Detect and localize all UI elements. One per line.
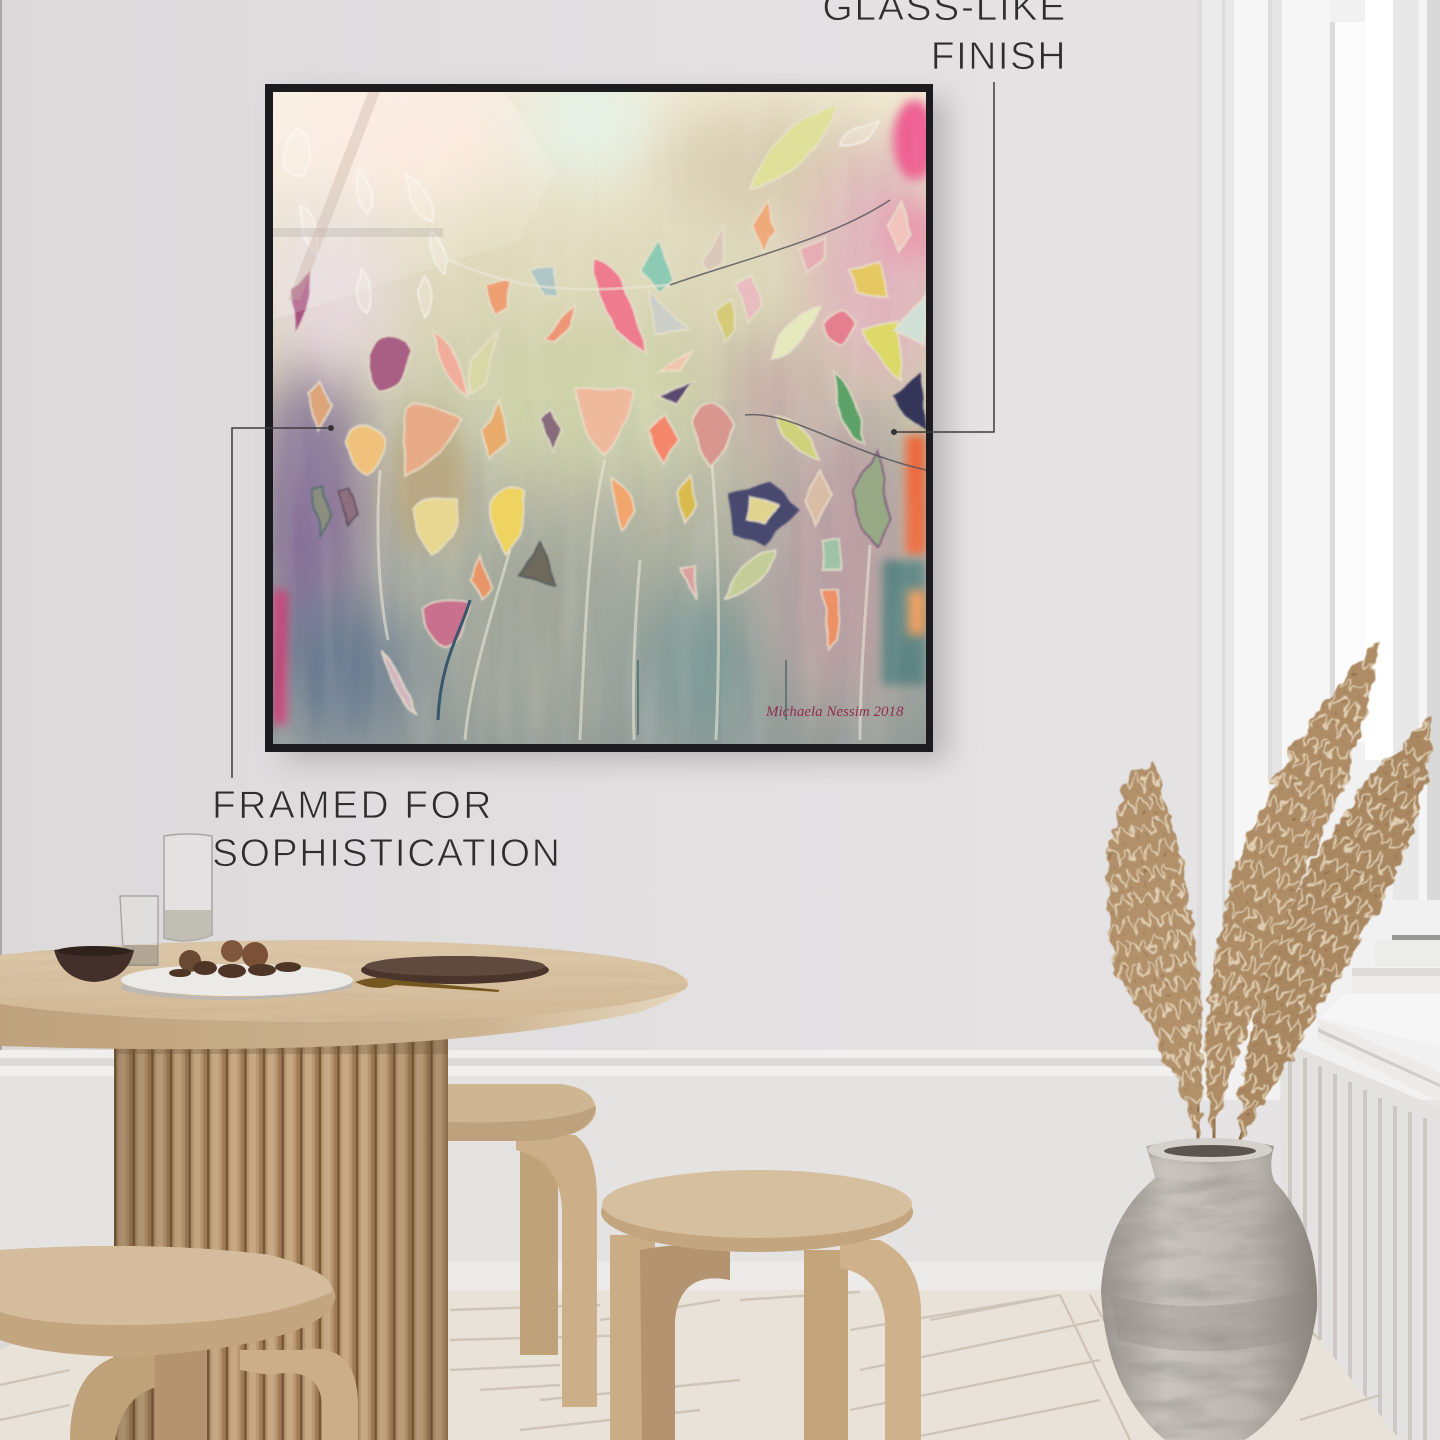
table pedestal [114, 1030, 448, 1440]
ceramic vase [1100, 1130, 1320, 1440]
bowl [54, 947, 134, 982]
pampas grass [1107, 640, 1432, 1145]
callout: framed for sophistication: SOPHISTICATION [212, 832, 562, 875]
radiator [1280, 1040, 1440, 1440]
abstract canvas [273, 92, 926, 744]
dark plate [361, 956, 549, 984]
glass jar [164, 834, 212, 941]
wainscot lower wall [0, 1050, 1200, 1290]
stems [1198, 1100, 1250, 1145]
signature: Michaela Nessim 2018 [765, 704, 904, 720]
callout: framed for sophistication [212, 425, 562, 875]
front stool left [0, 1246, 358, 1440]
spoon and fork [355, 978, 500, 992]
right plume [1240, 718, 1432, 1138]
front stool right [601, 1170, 921, 1440]
nuts [169, 940, 301, 978]
ghost leaves [283, 122, 880, 318]
glass reflection [273, 92, 513, 320]
framed painting [260, 60, 950, 752]
floor [0, 1290, 1400, 1440]
callout: framed for sophistication: FRAMED FOR [212, 784, 494, 827]
painting shadow [285, 98, 947, 760]
centre plume [1206, 640, 1380, 1135]
frame [265, 84, 933, 752]
stems [378, 250, 870, 740]
leaves [293, 105, 926, 715]
window frame [1197, 0, 1440, 1100]
callout: glass-like finish [822, 0, 1067, 435]
brush streak texture [919, 440, 924, 459]
back stool [448, 1084, 597, 1407]
left plume [1107, 765, 1203, 1140]
window sill with books [1318, 905, 1440, 1102]
callout: glass-like finish: FINISH [931, 35, 1067, 78]
marble board [122, 980, 352, 1000]
tableware [54, 834, 549, 1000]
table top [0, 935, 700, 1049]
tumbler [120, 896, 158, 965]
